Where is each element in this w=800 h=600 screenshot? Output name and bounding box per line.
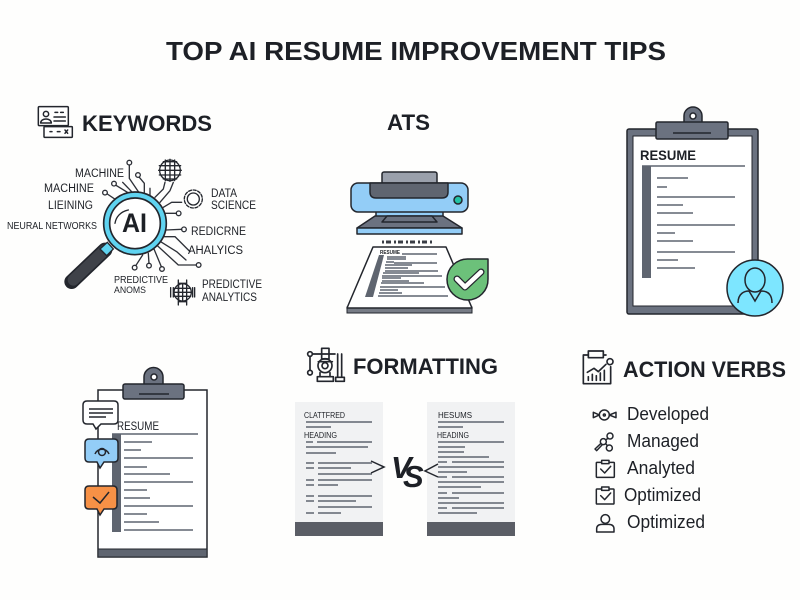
right document [427,402,515,536]
right document: HESUMS [438,411,472,420]
verb row: Optimized: Optimized [624,485,701,505]
icon: avatar [727,260,783,316]
verb row: Developed: Developed [627,404,709,424]
arrow: left pointing [425,464,438,477]
resume sidebar [112,434,121,532]
labels: keyword terms: MACHINE [44,183,94,195]
panel: formatting [295,348,515,536]
arrow: right pointing [371,461,384,473]
clipboard board [627,129,758,314]
labels: keyword terms: SCIENCE [211,200,256,212]
verb row: Analyted [596,458,695,478]
heading: ATS: ATS [387,110,430,135]
labels: keyword terms: MACHINE [75,168,124,180]
verb row: Managed [595,431,699,451]
resume sidebar [642,166,651,278]
bubble: text message [83,401,118,429]
clipboard paper [633,136,752,306]
title: TOP AI RESUME IMPROVEMENT TIPS [166,36,666,66]
left document [295,402,383,536]
clipboard footer band [98,549,207,557]
labels: keyword terms: PREDICTIVE [114,275,168,286]
verb row: Developed [593,404,709,424]
resume body lines [657,178,735,268]
bubble: blue signal [85,439,118,468]
labels: keyword terms: ANALYTICS [202,292,257,304]
heading: resume: RESUME [117,419,159,433]
label: VS: V [391,450,414,485]
panel: action verbs [583,351,786,532]
heading: formatting: FORMATTING [353,354,498,379]
panel: resume clipboard with avatar [627,107,783,316]
icon: chip globe with legs [171,280,195,305]
resume text lines [642,165,745,167]
heading: resume: RESUME [640,147,696,163]
heading: keywords: KEYWORDS [82,111,212,136]
icon: scanned resume page [347,247,472,313]
left document: HEADING [304,431,337,440]
clip [656,107,728,139]
icon: chart clipboard [583,351,613,384]
panel: resume clipboard with chat bubbles [83,368,207,557]
clipboard sheet [98,390,207,557]
icon: scanned resume page: RESUME [380,250,401,256]
printed output dots [382,240,434,244]
right document: HEADING [437,431,469,440]
bubble: orange check [85,486,117,515]
verb row: Optimized person: Optimized [627,512,705,532]
labels: keyword terms [7,168,262,304]
labels: keyword terms: DATA [211,188,237,200]
left document: CLATTFRED [304,411,345,420]
icon: magnifying glass with AI [72,192,166,282]
icon: keywords id cards [38,107,72,137]
panel: ATS [347,110,488,313]
labels: keyword terms: REDICRNE [191,226,246,238]
label: VS: S [403,459,424,494]
panel: keywords [7,107,262,305]
icon: formatting valve [308,348,344,381]
icon: printer [351,172,468,234]
labels: keyword terms: AHALYICS [188,245,243,257]
verb row: Managed: Managed [627,431,699,451]
labels: keyword terms: ANOMS [114,285,146,296]
labels: keyword terms: PREDICTIVE [202,279,262,291]
icon: globe chip [159,159,181,181]
labels: keyword terms: LIEINING [48,200,93,212]
label: AI: AI [122,208,147,238]
icon: gear [184,190,202,208]
labels: keyword terms: NEURAL NETWORKS [7,220,97,232]
verb row: Analyted: Analyted [627,458,695,478]
icon: green check shield [447,259,488,300]
heading: action verbs: ACTION VERBS [623,357,786,382]
resume text lines [112,434,198,530]
clip [123,368,184,399]
circuit lines and nodes [103,160,201,271]
